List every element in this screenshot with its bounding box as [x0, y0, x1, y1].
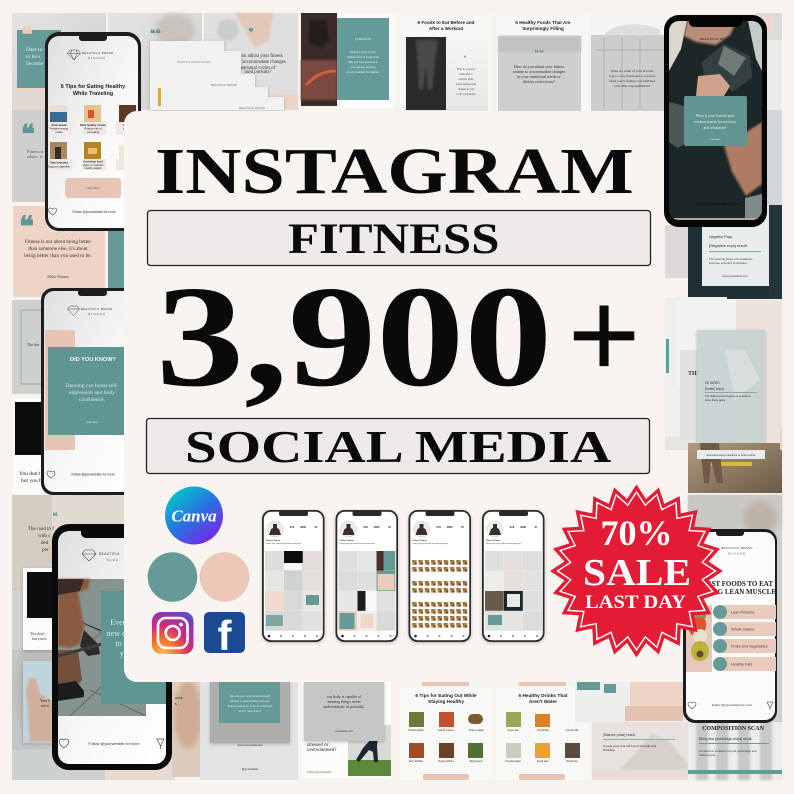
- post: legs at the park photo: [688, 430, 782, 493]
- collage: top row of post templates: [12, 13, 782, 208]
- post: stacked white pages staircase: BEAUTIFUL BRAND: [211, 83, 237, 87]
- post: composition scan: [Body fast percentage-mass] result: [699, 737, 751, 741]
- profile header: Fitness Trainer: [340, 539, 354, 542]
- phone: best foods to eat: [683, 529, 777, 723]
- post: 6 healthy foods filling: [496, 13, 589, 111]
- phone: dumbbell photo with question: [664, 15, 767, 227]
- food tips grid: meals: [55, 130, 63, 134]
- post: textured quote: [12, 495, 200, 590]
- teal card: confidence.: [79, 396, 106, 403]
- post: gray quote: others, it: [27, 154, 43, 160]
- post: teal card on gym photo: @yourwebsite: [242, 767, 259, 771]
- post: negative pays card on dark photo: The lowering phase of a resistance: [709, 257, 753, 261]
- post: runner on grass with gray quote: [301, 682, 391, 778]
- post: teal quote card: [12, 13, 106, 110]
- post: 6 tips eating out: 6 Tips for Eating Out While: [415, 693, 477, 699]
- post: gray quote: ❝: [21, 120, 35, 149]
- post: runner on grass with gray quote: Follow @yourwebsite: [307, 770, 332, 774]
- post: negative pays card on dark photo: Negative Pays: [709, 235, 732, 239]
- profile header: 37: [388, 525, 391, 529]
- mini phone 2: profile feed: [336, 510, 398, 642]
- post: 6 tips eating out: Order a salad: [469, 729, 484, 732]
- teal question card: What is your favorite post: [696, 114, 734, 118]
- post: composition scan: related areas.: [699, 753, 716, 757]
- post: barbell photo quote: do you adjust your fitness: [233, 54, 283, 59]
- logo text: BEAUTIFUL BRAND: [700, 37, 733, 41]
- post: 6 foods before workout: ❝: [463, 56, 467, 62]
- icon: Instagram: [152, 612, 194, 654]
- feed grid: [265, 551, 322, 631]
- footer: [47, 471, 115, 478]
- food tips grid: Can: [126, 164, 131, 168]
- profile header: [412, 521, 464, 545]
- post: runner on grass with gray quote: underestimate its potential.: [323, 705, 365, 709]
- teal question card: [684, 96, 747, 146]
- profile header: 37: [314, 525, 318, 529]
- post: layered fitness cards: [665, 297, 782, 450]
- teal card: new opportunity: [107, 629, 159, 638]
- icon: Canva logo: Canva: [171, 506, 217, 526]
- logo text: [722, 547, 752, 554]
- post: black and white card: but you h: [21, 478, 42, 484]
- post: 6 tips eating out: Skip dessert: [469, 760, 483, 763]
- heading box: FITNESS: FITNESS: [288, 216, 499, 263]
- post: 6 tips eating out: Ask for sauces: [438, 729, 455, 732]
- list bars: Whole Grains: [731, 628, 754, 632]
- post: 6 foods before workout: motivated to: [459, 73, 473, 76]
- post: 6 healthy foods filling: in your nutritional needs or: [517, 74, 561, 79]
- post: gym machines question: ways to stay motivated to exercise: [609, 74, 656, 78]
- logo: beautiful brand: BEAUTIFUL BRAND: [82, 51, 114, 55]
- post: battle rope photo with teal card: your training, and how: [350, 65, 376, 69]
- logo: beautiful brand: SLOGAN: [88, 56, 106, 60]
- pink block: [45, 330, 75, 450]
- post: 6 foods before workout: 6 Foods to Eat Before and: [418, 20, 475, 25]
- logo: beautiful brand: [68, 50, 114, 60]
- post: negative pays card on dark photo: [Negative reps] result: [709, 243, 748, 248]
- footer: Follow @yourwebsite for more: [88, 742, 140, 746]
- footer: [688, 702, 773, 710]
- big number: 3,900+: 3,900: [156, 256, 552, 416]
- food tips grid: overeating: [87, 130, 100, 134]
- post: 6 foods before workout: [400, 13, 492, 111]
- profile header: Reach your goals with personal programs.: [486, 542, 522, 545]
- post: gym machines question: [591, 13, 666, 111]
- post: black and white card: You don't: [19, 471, 41, 477]
- profile header: 4606: [520, 525, 526, 529]
- teal card: Dancing can boost self-: [66, 382, 119, 389]
- post: 6 healthy drinks: [496, 682, 589, 780]
- food tips grid: Reduce risk of: [84, 126, 102, 130]
- food tips grid: Prepare energy: [50, 126, 69, 130]
- post: 6 tips eating out: Read nutrition: [439, 760, 454, 763]
- food tips grid: Helps to maintain: [83, 163, 104, 167]
- teal card: DID YOU KNOW?: [70, 357, 117, 363]
- heading box: SOCIAL MEDIA: SOCIAL MEDIA: [185, 422, 612, 473]
- post: teal quote card: ❝: [21, 22, 33, 47]
- post: 6 healthy foods filling: 6 Healthy Foods That Are: [515, 20, 571, 25]
- phone: lifter photo with teal card: [52, 524, 172, 770]
- logo: beautiful brand: [82, 550, 120, 562]
- profile header: [340, 521, 391, 545]
- post: lower left photo background: [12, 590, 175, 780]
- post: teal quote card: Dare to: [26, 47, 43, 53]
- logo: beautiful brand: BEAUTIFUL: [99, 552, 120, 556]
- post: composition scan: COMPOSITION SCAN: [702, 726, 765, 732]
- post: shirtless model photo: s: [175, 702, 177, 706]
- post: textured quote: ded: [41, 541, 49, 546]
- post: top right edge sliver: [755, 13, 782, 208]
- badge text: [583, 513, 691, 613]
- post: 6 foods before workout: changes in your: [458, 88, 474, 91]
- post: pink quote with author: ❝: [19, 212, 34, 243]
- photo: lifter deadlift: [58, 579, 148, 716]
- teal question card: Learn More: [709, 138, 721, 141]
- profile header: 37: [461, 525, 464, 529]
- profile header: [486, 521, 538, 545]
- post: 6 healthy foods filling: routine to accommodate changes: [513, 69, 566, 74]
- heading: BUILDING LEAN MUSCLE: [688, 588, 776, 596]
- post: framed gray card: [12, 300, 45, 394]
- post: gym machines question: What are some of your favorite: [611, 69, 654, 73]
- post: textured quote: The road to f: [28, 527, 54, 532]
- post: 6 tips eating out: Choose grilled: [408, 729, 424, 732]
- post: legs at the park photo: Exercises using resistance to build muscle: [707, 453, 756, 457]
- main center panel: [124, 111, 664, 682]
- list bars: Fruits and Vegetables: [731, 644, 768, 648]
- mini phone 1: profile feed: [262, 510, 324, 642]
- food tips grid: Choose: [123, 123, 133, 127]
- post: composition scan: [688, 495, 782, 780]
- footer: [59, 739, 164, 749]
- bottom nav: [414, 635, 464, 637]
- food tips grid: [48, 105, 140, 170]
- post: battle rope photo with teal card: [301, 13, 395, 109]
- profile header: Fitness Trainer: [486, 539, 500, 542]
- post: black card in stack: [23, 568, 53, 650]
- food tips grid: Pack ahead: [52, 123, 67, 127]
- profile header: Reach your goals with personal programs.: [340, 542, 375, 545]
- post: 6 healthy drinks: Kombucha: [537, 729, 549, 732]
- food tips grid: Stay hydrated: [50, 160, 68, 164]
- post: 6 healthy drinks: Fresh juice: [537, 760, 550, 763]
- post: 6 healthy drinks: Herbal tea: [566, 760, 578, 763]
- logo text: BEAUTIFUL BRAND: [721, 546, 753, 550]
- post: battle rope photo with teal card: QUESTION: [355, 37, 371, 41]
- post: layered fitness cards: The highest point of gains as is working: [705, 394, 751, 398]
- profile header: Fitness Trainer: [266, 539, 280, 542]
- teal card: yourself: [120, 649, 146, 658]
- icon: Canva logo: [165, 486, 223, 544]
- post: runner on grass with gray quote: amazing things, never: [327, 700, 361, 705]
- mini phone 4: profile feed: [482, 510, 544, 642]
- post: 6 foods before workout: How do you stay: [457, 68, 476, 71]
- profile header: 37: [534, 525, 538, 529]
- profile header: 279: [510, 525, 515, 529]
- post: sky arm flex photo: Your li: [40, 699, 50, 703]
- post: framed gray card: The fina: [27, 343, 39, 347]
- heading: [709, 581, 775, 594]
- footer: Follow @yourwebsite for more: [72, 210, 116, 214]
- profile header: Reach your goals with personal programs.: [266, 542, 302, 545]
- post: textured quote: with c: [38, 534, 51, 539]
- title: INSTAGRAM: INSTAGRAM: [155, 134, 634, 208]
- post: gray photo quote: [108, 13, 202, 110]
- bottom nav: [268, 635, 318, 637]
- profile header: 279: [436, 525, 441, 529]
- teal question card: workout snacks for recovery: [694, 120, 736, 124]
- food feed grid: [412, 559, 468, 629]
- post: teal card on gym photo: fitness routine for improved strength: [228, 704, 273, 708]
- post: barbell photo quote: [204, 13, 298, 110]
- post: teal quote card: become: [26, 61, 44, 67]
- post: yoga pose result with stacked cards: A yoga pose that will boost strength and: [603, 744, 656, 748]
- heading: 6 Tips for Eating Healthy: [61, 84, 126, 90]
- profile header: 4606: [447, 525, 453, 529]
- post: pink quote with author: [13, 206, 124, 297]
- badge text: SALE: [583, 552, 691, 594]
- heading: BEST FOODS TO EAT: [702, 580, 773, 588]
- post: yoga pose result with stacked cards: flexibility.: [603, 748, 615, 752]
- post: stacked white pages staircase: [150, 41, 284, 110]
- heading: While Traveling: [73, 91, 113, 97]
- post: 6 healthy foods filling: How do you adjust your fitness: [514, 64, 564, 69]
- post: runner on grass with gray quote: overwhelmed?: [307, 748, 337, 753]
- post: gym machines question: when you're feeling overwhelmed: [609, 79, 655, 83]
- footer: Follow @yourwebsite for more: [71, 472, 115, 476]
- post: teal card on gym photo: [200, 682, 298, 780]
- list bars: Healthy Fats: [731, 662, 752, 666]
- color swatch: teal: [148, 552, 197, 602]
- post: pink quote with author: than someone else, it's about: [28, 246, 88, 252]
- food tips grid: Read: [125, 160, 132, 164]
- badge text: 70%: [600, 513, 672, 553]
- collage: right column of post templates: [665, 205, 782, 780]
- post: 6 healthy drinks: Low-fat milk: [566, 729, 579, 732]
- logo: beautiful brand: SLOG: [107, 558, 119, 562]
- post: shirtless model photo: [172, 681, 205, 777]
- starburst: [550, 484, 723, 658]
- post: barbell photo quote: personal cycles of: [241, 66, 276, 71]
- post: runner on grass with gray quote: yourwebsite.com: [335, 730, 353, 733]
- post: 6 healthy drinks: 6 Healthy Drinks That: [518, 693, 568, 699]
- icon: Facebook: [204, 612, 245, 659]
- profile header: [266, 521, 318, 545]
- post: black card in stack: but you h: [32, 637, 46, 641]
- post: yoga pose result with stacked cards: [575, 682, 688, 780]
- post: pink quote with author: being better than you used to be.: [24, 253, 92, 259]
- profile header: Fitness Trainer: [412, 539, 427, 542]
- logo: beautiful brand: BEAUTIFUL BRAND: [81, 307, 113, 311]
- footer: [48, 208, 116, 215]
- logo: beautiful brand: [68, 306, 113, 316]
- post: stacked white pages staircase: BEAUTIFUL BRAND: [239, 106, 265, 110]
- post: teal card on gym photo: How do you incorporate strength: [230, 694, 271, 698]
- post: runner on grass with gray quote: our body is capable of: [327, 695, 362, 699]
- footer: Follow @yourwebsite for more: [696, 202, 740, 206]
- teal card: expression and body: [69, 390, 115, 396]
- mini phone 3: food feed: [408, 510, 471, 642]
- food tips grid: Supports digestion: [48, 164, 71, 168]
- post: shirtless model photo: work: [175, 696, 183, 700]
- post: 6 healthy drinks: Green tea: [508, 729, 519, 732]
- post: 6 tips eating out: Eat mindfully: [409, 760, 424, 763]
- post: composition scan: A method to measure body fat percentage and: [699, 749, 757, 753]
- feed grid: [485, 551, 542, 631]
- big number: 3,900+: +: [567, 264, 641, 408]
- collage: left column of post templates: [12, 110, 200, 780]
- icon: Facebook: f: [218, 612, 232, 659]
- post: stacked white pages staircase: BEAUTIFUL BRAND SLOGAN: [178, 61, 211, 64]
- heading box: FITNESS: [148, 210, 650, 266]
- button: Learn More: [86, 186, 100, 190]
- post: teal card on gym photo: training or weight lifting into your: [230, 699, 270, 703]
- post: gym machines question: with other responsibilities?: [614, 84, 651, 88]
- post: layered fitness cards: 20 SEED: [705, 381, 720, 385]
- post: battle rope photo with teal card: What are some of your: [350, 50, 376, 54]
- post: barbell photo quote: ♥: [248, 25, 254, 35]
- post: 6 foods before workout: you're dealing with: [456, 83, 477, 86]
- post: teal quote card: to be s: [26, 54, 40, 60]
- button: [65, 178, 121, 198]
- post: pink quote with author: Maha Sharma: [47, 275, 69, 279]
- heading: [61, 84, 126, 97]
- post: negative pays card on dark photo: exercise, eccentric contraction.: [709, 261, 748, 265]
- teal card: Every day is a: [110, 618, 156, 627]
- post: 6 healthy foods filling: ❝❝: [534, 48, 544, 58]
- post: sky arm flex photo: not w: [41, 704, 49, 708]
- sale badge: [550, 484, 723, 658]
- post: 6 healthy drinks: Coconut water: [505, 760, 521, 763]
- footer: Follow @yourwebsite for more: [712, 703, 753, 707]
- post: negative pays card on dark photo: www.yourwebsite.com: [722, 274, 748, 278]
- notch: [689, 15, 742, 27]
- post: pink quote with author: Fitness is not about being better: [25, 239, 91, 245]
- post: 6 tips eating out: [400, 682, 492, 780]
- post: 6 tips eating out: Staying Healthy: [428, 699, 464, 705]
- post: 6 foods before workout: After a Workout: [429, 26, 464, 31]
- post: gray quote: Fitness is: [27, 149, 44, 154]
- post: layered fitness cards: [Smith] result: [705, 387, 724, 391]
- post: yoga pose result with stacked cards: [Warrior pose] result: [603, 733, 635, 737]
- logo text: SLOGAN: [728, 552, 746, 556]
- post: barbell photo quote: hold pursuits?: [244, 70, 272, 75]
- profile header: 4606: [374, 525, 380, 529]
- list bars: Lean Proteins: [731, 610, 755, 614]
- profile header: 279: [363, 525, 368, 529]
- post: sky arm flex photo: [23, 661, 53, 743]
- bottom nav: [341, 635, 392, 637]
- post: battle rope photo with teal card: favorite ways to incorporate: [347, 55, 379, 59]
- feed grid: [338, 551, 395, 631]
- post: 6 foods before workout: body composition: [457, 93, 476, 96]
- teal question card: and relaxation?: [704, 126, 727, 130]
- phone: 6 tips for eating healthy: [45, 32, 141, 231]
- teal card: [101, 591, 166, 704]
- teal card: to improve: [116, 639, 151, 648]
- color swatch: blush: [200, 552, 249, 602]
- post: teal card on gym photo: www.yourwebsite.com: [237, 743, 263, 747]
- post: battle rope photo with teal card: do you maintain the balance: [347, 70, 380, 74]
- food tips grid: Avoid fast food: [83, 160, 103, 164]
- teal card: [48, 347, 128, 435]
- bottom nav: [488, 635, 538, 637]
- profile header: 279: [290, 525, 295, 529]
- post: negative pays card on dark photo: [665, 205, 782, 299]
- post: 6 healthy foods filling: dietary restrictions?: [523, 79, 555, 84]
- photo: man with dumbbell: [669, 21, 762, 220]
- food image: [686, 605, 712, 672]
- post: runner on grass with gray quote: stressed or: [307, 743, 329, 748]
- post: layered fitness cards: THI: [688, 371, 700, 377]
- food tips grid: healthy weight: [84, 166, 102, 170]
- post: black and white card: [13, 399, 45, 494]
- profile header: 4606: [300, 525, 306, 529]
- phone: did you know: [41, 288, 141, 495]
- post: 6 healthy foods filling: Surprisingly Filling: [522, 26, 564, 31]
- list bars: [713, 605, 776, 671]
- post: battle rope photo with teal card: daily self-care practices in: [348, 60, 378, 64]
- post: black card in stack: You don't: [30, 632, 45, 636]
- post: 6 healthy drinks: Aren't Water: [529, 699, 557, 705]
- food tips grid: Balance: [123, 127, 133, 131]
- food tips grid: Pack healthy snacks: [80, 123, 107, 127]
- post: gray photo quote: ❝❝: [150, 29, 161, 40]
- collage: bottom row of post templates: [172, 681, 688, 780]
- post: textured quote: ❝: [52, 511, 58, 523]
- post: gray quote: [12, 110, 106, 202]
- post: barbell photo quote: ine to accommodate changes: [230, 60, 286, 65]
- post: textured quote: per: [42, 548, 49, 553]
- post: 6 foods before workout: exercise when: [459, 78, 474, 81]
- badge text: LAST DAY: [585, 592, 686, 613]
- logo: beautiful brand: SLOGAN: [88, 312, 106, 316]
- post: layered fitness cards: down these gains.: [705, 398, 726, 402]
- post: teal card on gym photo: and to your body?: [239, 709, 262, 713]
- teal card: Learn More: [86, 421, 99, 424]
- profile header: Reach your goals with personal programs.: [412, 542, 448, 545]
